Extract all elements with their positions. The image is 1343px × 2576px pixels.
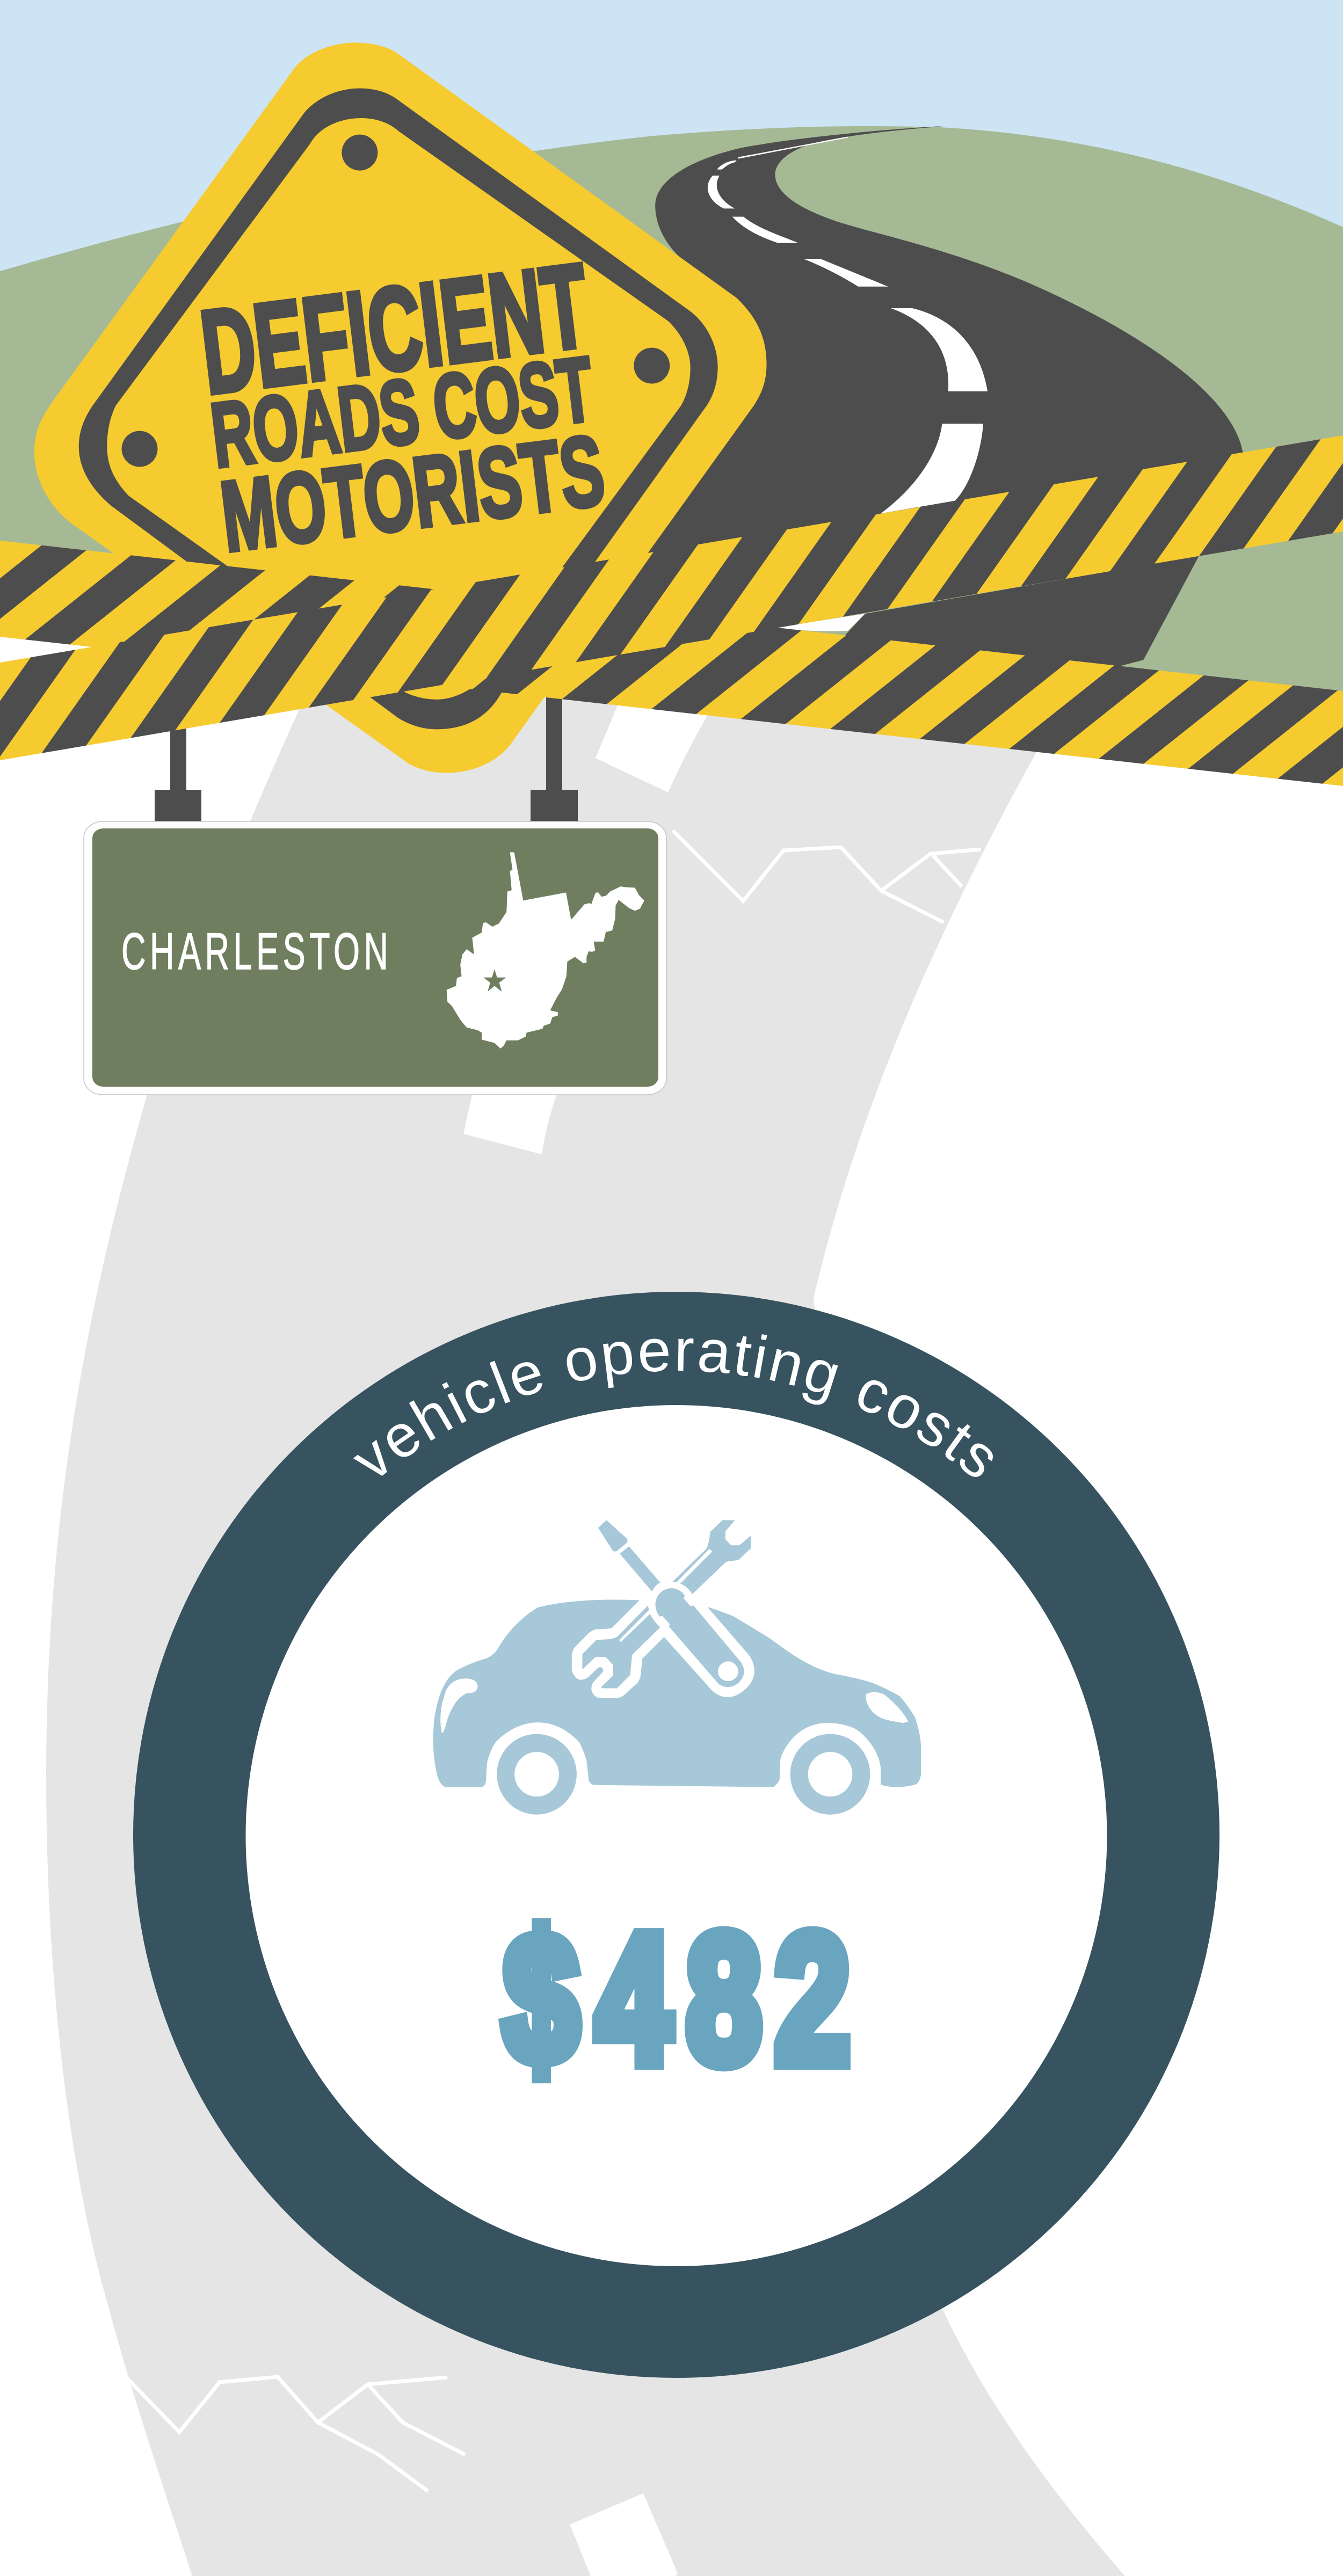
sign posts xyxy=(155,687,578,822)
title: deficient roads cost motorists: ROADS COST xyxy=(206,338,598,486)
grey foreground road xyxy=(46,671,1125,2576)
caution tape: rising band xyxy=(0,435,1343,760)
screwdriver xyxy=(598,1520,744,1687)
icon: West Virginia map with capital star xyxy=(447,852,644,1049)
city name: CHARLESTON xyxy=(121,922,392,980)
caution tape: falling band xyxy=(0,541,1343,786)
panel: vehicle operating costs ring xyxy=(133,1292,1219,2378)
road centre line xyxy=(708,136,988,631)
amount: $482: $482 xyxy=(504,1897,850,2101)
title: deficient roads cost motorists: MOTORISTS xyxy=(215,414,610,573)
title: deficient roads cost motorists xyxy=(194,239,610,573)
icon: car with crossed tools xyxy=(433,1520,921,1815)
winding road on the hill xyxy=(565,126,1243,667)
landscape: sky and hills xyxy=(0,0,1343,698)
wrench xyxy=(582,1520,751,1689)
green city sign xyxy=(84,821,666,1095)
title: deficient roads cost motorists: DEFICIENT xyxy=(194,239,595,419)
road cracks xyxy=(127,831,981,2491)
ring label: vehicle operating costs xyxy=(353,1334,993,1477)
warning diamond sign xyxy=(34,42,767,773)
